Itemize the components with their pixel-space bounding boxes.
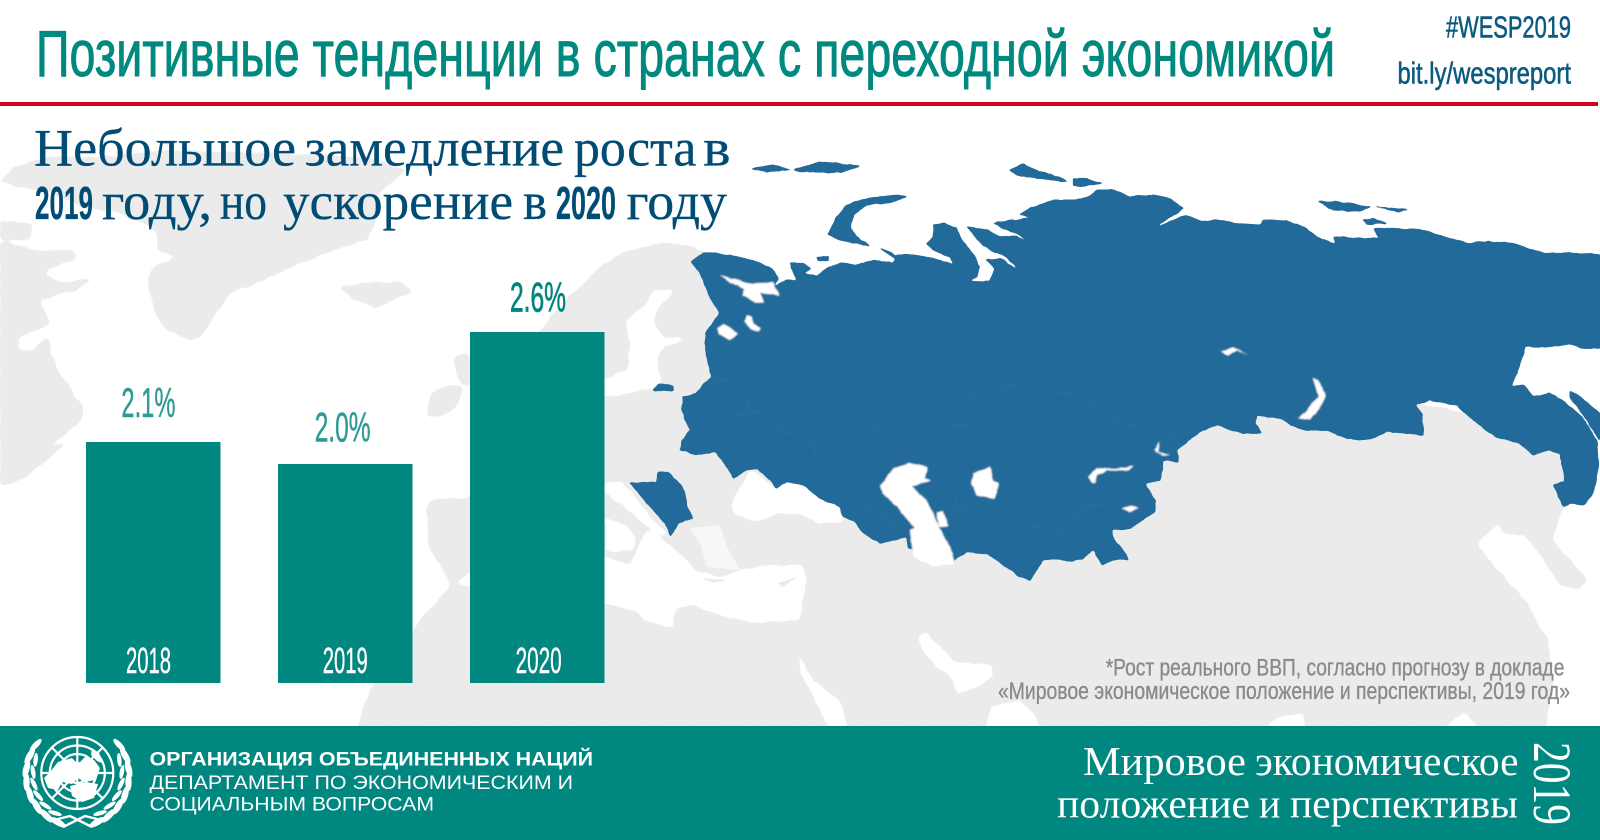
Sakhalin xyxy=(1570,392,1600,445)
subtitle: но xyxy=(220,173,267,231)
Moldova and Western Balkans region xyxy=(630,472,693,536)
South China coast xyxy=(1443,712,1480,727)
footer band xyxy=(0,726,1600,840)
subtitle: году xyxy=(626,173,728,231)
bar 2020: 2020 xyxy=(516,640,562,681)
Canada xyxy=(0,243,97,487)
Baltic Sea xyxy=(627,290,693,390)
report name: Мировое xyxy=(1083,738,1246,784)
Ireland xyxy=(428,385,463,418)
subtitle: в xyxy=(703,120,731,178)
Mediterranean xyxy=(455,530,807,628)
Bay of Bengal xyxy=(1263,713,1307,727)
subtitle: ускорение xyxy=(283,173,513,231)
Eurasia and Africa xyxy=(357,242,1587,730)
footnote xyxy=(998,655,1570,705)
Aegean xyxy=(690,525,740,570)
organisation name: ДЕПАРТАМЕНТ ПО ЭКОНОМИЧЕСКИМ И xyxy=(150,773,573,794)
red divider xyxy=(0,102,1598,106)
report name: перспективы xyxy=(1290,781,1518,827)
subtitle: в xyxy=(523,173,547,231)
Arabian Sea xyxy=(985,700,1040,727)
Adriatic xyxy=(605,480,667,537)
Red Sea xyxy=(783,637,848,727)
Scotland fragment xyxy=(453,353,470,387)
subtitle: Небольшое xyxy=(34,120,296,178)
Russia and Central Asia xyxy=(680,190,1600,580)
subtitle: году, xyxy=(102,173,212,231)
organisation name: СОЦИАЛЬНЫМ ВОПРОСАМ xyxy=(150,795,434,816)
Kaliningrad xyxy=(653,383,673,391)
Black Sea xyxy=(730,468,843,523)
Novaya Zemlya xyxy=(828,195,907,246)
report name xyxy=(1057,738,1518,827)
bar 2018: 2018 xyxy=(126,640,171,681)
bar 2019: 2.0% xyxy=(315,404,370,451)
bar 2018 xyxy=(86,379,220,683)
Caspian Sea xyxy=(880,463,955,567)
continents xyxy=(44,748,104,802)
organisation name xyxy=(150,749,593,816)
internal borders xyxy=(712,377,1177,537)
Iceland xyxy=(340,282,413,308)
Mediterranean islands xyxy=(702,577,797,587)
icon: UN emblem xyxy=(21,737,134,830)
highlighted region: countries with economies in transition xyxy=(630,162,1600,580)
olive wreath left xyxy=(21,737,67,830)
bar 2019: 2019 xyxy=(323,640,368,681)
Azov xyxy=(782,462,810,480)
seas xyxy=(455,290,1480,727)
Persian Gulf xyxy=(917,632,993,693)
grey land masses xyxy=(0,150,1587,730)
North Sea xyxy=(590,363,653,396)
world map background xyxy=(0,150,1600,730)
report name: экономическое xyxy=(1255,738,1518,784)
globe xyxy=(41,737,113,809)
Arctic islands xyxy=(752,162,1408,261)
olive wreath right xyxy=(88,737,134,830)
bar chart xyxy=(86,274,604,683)
subtitle: 2020 xyxy=(556,177,616,229)
wreath ribbon xyxy=(50,816,105,827)
report name: и xyxy=(1259,781,1280,827)
subtitle: замедление xyxy=(305,120,564,178)
report name: положение xyxy=(1057,781,1250,827)
organisation name: ОРГАНИЗАЦИЯ ОБЪЕДИНЕННЫХ НАЦИЙ xyxy=(150,749,593,771)
lakes and inlets xyxy=(717,275,1326,567)
bar 2019 xyxy=(278,404,412,683)
subtitle xyxy=(34,120,731,231)
Tyrrhenian xyxy=(605,517,638,552)
bar 2018: 2.1% xyxy=(121,379,175,426)
Greenland xyxy=(0,150,407,340)
bar 2020 xyxy=(470,274,604,683)
Arctic Canada island xyxy=(0,220,33,240)
subtitle: роста xyxy=(574,120,696,178)
subtitle: 2019 xyxy=(35,177,93,229)
bar 2020: 2.6% xyxy=(510,274,566,321)
